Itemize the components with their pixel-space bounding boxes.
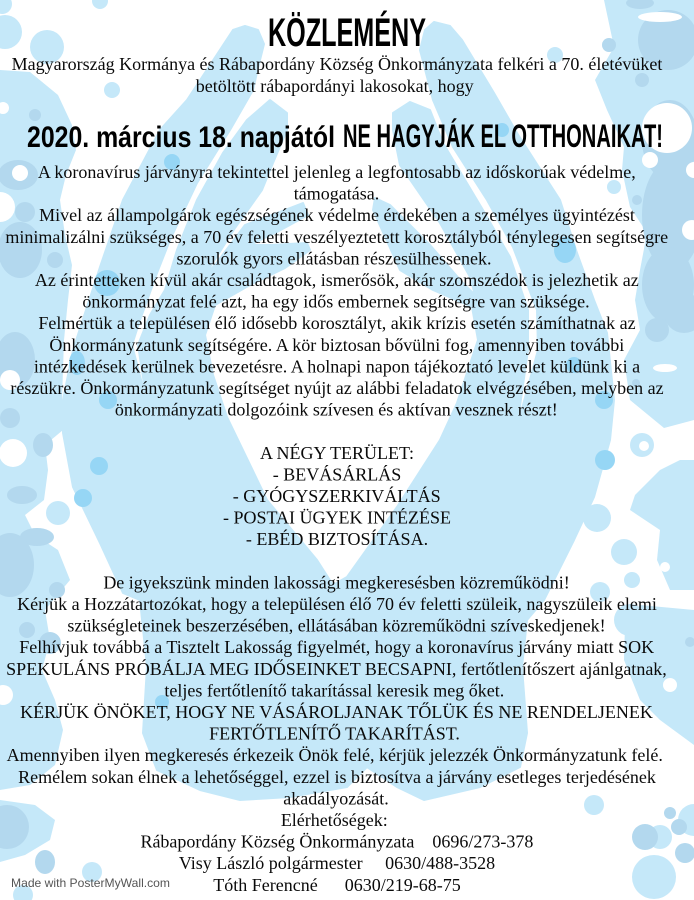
intro text: Magyarország Kormánya és Rábapordány Község Önkormányzata felkéri a 70. életévüket [12,54,662,74]
body text: warning: De igyekszünk minden lakossági megkeresésben közreműködni! [103,572,570,592]
body text: situation: Mivel az állampolgárok egészségének védelme érdekében a személyes ügyintézést [39,205,635,225]
body text: situation: intézkedések kerülnek bevezetésre. A holnapi napon tájékoztató levelet küldünk ki a [34,356,640,376]
body text: situation: Az érintetteken kívül akár családtagok, ismerősök, akár szomszédok is jelezhetik az [35,270,639,290]
body text: warning: FERTŐTLENÍTŐ TAKARÍTÁST. [209,723,460,744]
body text: warning: akadályozását. [283,788,389,808]
body text: situation: Önkormányzatunk segítségére. A kör biztosan bővülni fog, amennyiben további [49,335,624,355]
body text: warning: szükségleteinek beszerzésében, ellátásában közreműködni szíveskedjenek! [67,616,606,636]
list: the four areas: A NÉGY TERÜLET: [260,442,414,463]
intro text [12,54,662,96]
body text: situation: önkormányzati dolgozóink szívesen és aktívan vesznek részt! [115,400,558,420]
watermark: Made with PosterMyWall.com [11,876,170,890]
body text: situation [5,162,668,420]
body text: situation: minimalizálni szükséges, a 70 év feletti veszélyeztetett korosztályból ténylegesen segítségre [5,227,668,247]
body text: situation: szorulók gyors ellátásban részesülhessenek. [177,248,491,268]
body text: situation: részükre. Önkormányzatunk segítséget nyújt az alábbi feladatok elvégzésében, melyben az [10,378,664,398]
body text: situation: Felmértük a településen élő idősebb korosztályt, akik krízis esetén számíthatnak az [38,313,636,333]
body text: warning [6,572,667,808]
body text: warning: teljes fertőtlenítő takarítással keresik meg őket. [164,680,504,700]
list: the four areas: - POSTAI ÜGYEK INTÉZÉSE [223,507,451,528]
body text: situation: önkormányzat felé azt, ha egy idős embernek segítségre van szüksége. [82,292,590,312]
list: the four areas: - GYÓGYSZERKIVÁLTÁS [233,485,441,506]
list: the four areas [223,442,451,549]
body text: situation: támogatása. [294,184,379,204]
body text: warning: Kérjük a Hozzátartozókat, hogy a településen élő 70 év feletti szüleik, nagyszüleik elemi [17,594,657,614]
body text: warning: Felhívjuk továbbá a Tisztelt Lakosság figyelmét, hogy a koronavírus járvány miatt SOK [19,637,654,657]
body text: warning: KÉRJÜK ÖNÖKET, HOGY NE VÁSÁROLJANAK TŐLÜK ÉS NE RENDELJENEK [20,701,653,722]
list: the four areas: - EBÉD BIZTOSÍTÁSA. [246,528,428,549]
contacts: Rábapordány Község Önkormányzata 0696/273-378 [140,832,533,852]
intro text: betöltött rábapordányi lakosokat, hogy [196,76,474,96]
date headline [27,118,663,154]
date headline: 2020. március 18. napjától [27,121,335,154]
contacts: Elérhetőségek: [281,810,388,830]
body text: warning: Remélem sokan élnek a lehetőséggel, ezzel is biztosítva a járvány esetleges terjedésének [18,767,656,787]
title: KÖZLEMÉNY [268,10,426,55]
contacts: Tóth Ferencné 0630/219-68-75 [213,875,461,895]
list: the four areas: - BEVÁSÁRLÁS [273,463,401,484]
contacts: Visy László polgármester 0630/488-3528 [179,853,495,873]
contacts [140,810,533,895]
body text: warning: SPEKULÁNS PRÓBÁLJA MEG IDŐSEINKET BECSAPNI, fertőtlenítőszert ajánlgatnak, [6,658,667,679]
body text: warning: Amennyiben ilyen megkeresés érkezeik Önök felé, kérjük jelezzék Önkormányzatunk felé. [7,745,663,765]
body text: situation: A koronavírus járványra tekintettel jelenleg a legfontosabb az időskorúak védelme, [38,162,636,182]
